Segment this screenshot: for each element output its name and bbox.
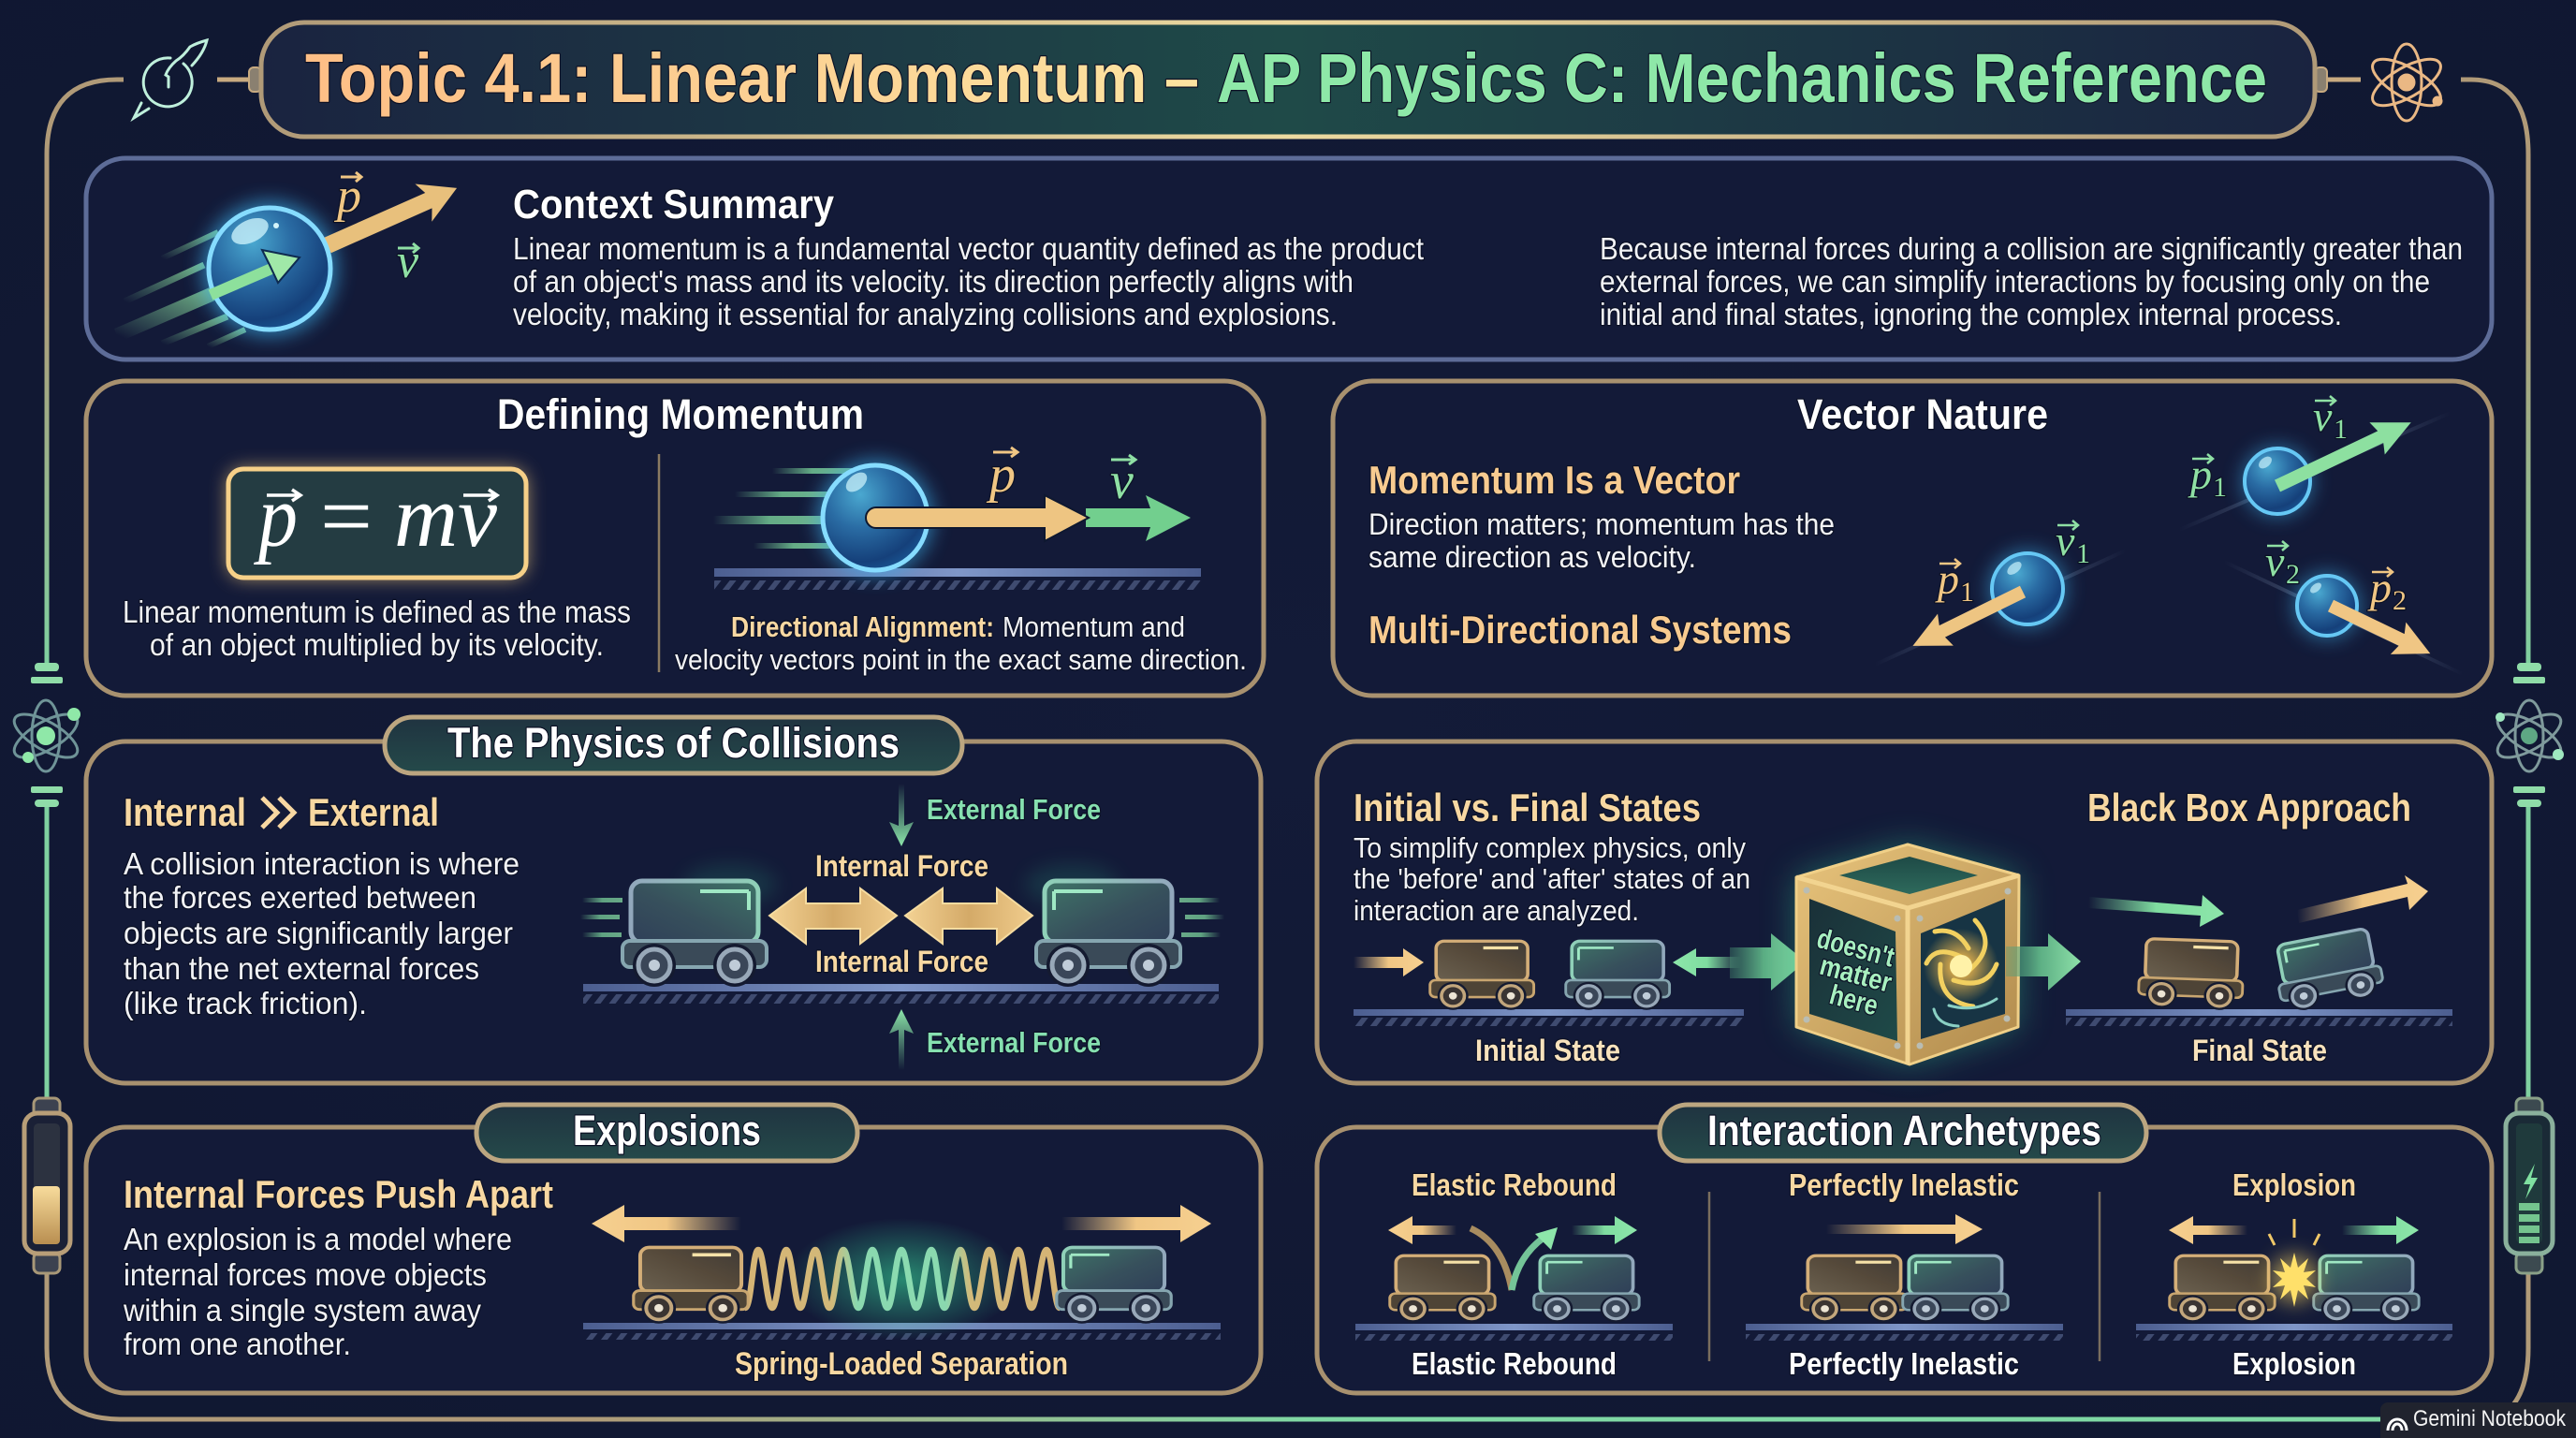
panel: interaction archetypes bbox=[1317, 1105, 2492, 1393]
arrow: external force down bbox=[889, 784, 914, 846]
text block: definition: of an object's mass and its velocity. its direction perfectly aligns with bbox=[513, 264, 1354, 299]
heading pill: interaction archetypes: Interaction Archetypes bbox=[1707, 1107, 2101, 1154]
label: spring-loaded separation: Spring-Loaded Separation bbox=[735, 1346, 1068, 1382]
header right atom icon bbox=[2365, 44, 2448, 121]
track: initial bbox=[1354, 1009, 1744, 1026]
right frame connector and atom icon bbox=[2492, 663, 2567, 807]
column: perfectly inelastic: Perfectly Inelastic bbox=[1789, 1167, 2019, 1202]
labels: p1 and v1 green: 1 bbox=[2334, 414, 2348, 445]
panel: initial vs final states bbox=[1317, 741, 2492, 1083]
column: explosion: Explosion bbox=[2232, 1346, 2356, 1381]
labels: p1 tan and v1 green: v bbox=[2056, 517, 2075, 565]
track bbox=[714, 568, 1201, 590]
label: p vector: p bbox=[333, 169, 361, 223]
text block: internal forces: Because internal forces during a collision are significantly greater than bbox=[1600, 231, 2463, 266]
heading pill: explosions: Explosions bbox=[573, 1107, 761, 1154]
labels: v2 and p2 bbox=[2265, 537, 2407, 616]
caption: definition bbox=[123, 594, 631, 662]
arrow: out of box bbox=[2006, 933, 2081, 990]
right cart bbox=[1057, 1247, 1171, 1324]
sphere A with green vector bbox=[2179, 406, 2451, 530]
text block: definition bbox=[513, 231, 1424, 331]
formula box bbox=[228, 468, 526, 578]
left cart bbox=[634, 1247, 748, 1324]
arrows: internal forces bbox=[769, 888, 1032, 944]
column: explosion: Explosion bbox=[2232, 1167, 2356, 1202]
formula box: = bbox=[320, 468, 373, 565]
sphere C with tan vector bbox=[2224, 562, 2463, 674]
formula box: mv bbox=[394, 468, 497, 565]
text: collision definition: A collision interaction is where bbox=[124, 846, 520, 881]
text: simplify bbox=[1354, 831, 1750, 927]
column: perfectly inelastic bbox=[1746, 1167, 2063, 1381]
text: simplify: the 'before' and 'after' states of an bbox=[1354, 862, 1750, 895]
label: internal force top: Internal Force bbox=[815, 849, 988, 883]
title text left: Topic 4.1: Linear Momentum – bbox=[305, 39, 1199, 117]
subheading: multi-directional systems: Multi-Directional Systems bbox=[1368, 608, 1792, 652]
text: collision definition bbox=[124, 846, 520, 1020]
initial carts and arrows bbox=[1354, 941, 1741, 1010]
panel: physics of collisions bbox=[86, 717, 1261, 1083]
swirl bbox=[1924, 920, 1998, 1026]
track bbox=[583, 984, 1219, 1004]
icon: sphere with aligned vectors bbox=[713, 460, 1191, 576]
text block: internal forces: initial and final states, ignoring the complex internal process. bbox=[1600, 297, 2342, 331]
labels: p1 and v1 green: p bbox=[2188, 450, 2212, 498]
label: p vector: p bbox=[986, 446, 1016, 504]
left cart bbox=[580, 864, 777, 987]
text block: internal forces: external forces, we can simplify interactions by focusing only on the bbox=[1600, 264, 2430, 299]
panel: explosions bbox=[86, 1105, 1261, 1393]
burst bbox=[2269, 1219, 2320, 1307]
labels: p1 and v1 green: v bbox=[2313, 392, 2333, 440]
title text right: AP Physics C: Mechanics Reference bbox=[1217, 39, 2267, 117]
panel: defining momentum bbox=[86, 381, 1264, 696]
track: final bbox=[2066, 1009, 2452, 1026]
label: external force top: External Force bbox=[927, 793, 1101, 826]
text: simplify: interaction are analyzed. bbox=[1354, 894, 1639, 927]
box text: doesn't bbox=[1814, 923, 1897, 974]
labels: v2 and p2: 2 bbox=[2286, 559, 2300, 590]
track bbox=[583, 1323, 1221, 1340]
label: v vector: v bbox=[397, 235, 419, 288]
subheading: momentum is a vector: Momentum Is a Vector bbox=[1368, 458, 1740, 502]
panel: vector nature bbox=[1333, 381, 2492, 696]
text block: internal forces bbox=[1600, 231, 2463, 331]
text: collision definition: (like track friction). bbox=[124, 986, 367, 1020]
text: collision definition: the forces exerted between bbox=[124, 880, 476, 915]
label: internal force bottom: Internal Force bbox=[815, 945, 988, 978]
header right connector bbox=[2315, 67, 2361, 92]
text: explosion definition: An explosion is a model where bbox=[124, 1222, 512, 1256]
caption: definition: Linear momentum is defined as the mass bbox=[123, 594, 631, 629]
caption: directional alignment: Momentum and bbox=[1003, 610, 1185, 643]
column: perfectly inelastic: Perfectly Inelastic bbox=[1789, 1346, 2019, 1381]
heading: context summary: Context Summary bbox=[513, 182, 834, 227]
header left connector bbox=[217, 67, 261, 92]
sphere B with tan vector bbox=[1875, 550, 2126, 665]
labels: v2 and p2: 2 bbox=[2393, 585, 2407, 616]
text: explosion definition: from one another. bbox=[124, 1327, 351, 1361]
text block: definition: Linear momentum is a fundamental vector quantity defined as the product bbox=[513, 231, 1424, 266]
heading pill: explosions bbox=[476, 1105, 857, 1161]
caption: directional alignment: velocity vectors point in the exact same direction. bbox=[675, 643, 1247, 676]
labels: p1 and v1 green bbox=[2188, 392, 2348, 503]
subheading: internal forces push apart: Internal Forces Push Apart bbox=[124, 1172, 553, 1216]
label: initial state: Initial State bbox=[1475, 1034, 1620, 1067]
labels: p1 tan and v1 green bbox=[1935, 517, 2090, 608]
caption: directional alignment: Directional Alignment: bbox=[731, 610, 994, 643]
column: elastic rebound bbox=[1355, 1167, 1673, 1381]
title plaque bbox=[261, 22, 2315, 137]
labels: v2 and p2: v bbox=[2265, 537, 2285, 585]
text: explosion definition: within a single system away bbox=[123, 1293, 481, 1328]
right cart bbox=[1025, 864, 1224, 987]
heading pill: the physics of collisions: The Physics of Collisions bbox=[447, 719, 900, 767]
label: final state: Final State bbox=[2192, 1034, 2327, 1067]
caption: definition: of an object multiplied by its velocity. bbox=[150, 627, 604, 662]
labels: p1 tan and v1 green: 1 bbox=[1960, 577, 1974, 608]
right battery capsule bbox=[2506, 1098, 2553, 1273]
arrow: right push bbox=[1061, 1205, 1211, 1242]
box text: matter bbox=[1817, 950, 1895, 999]
subheading: internal much greater than external bbox=[124, 790, 439, 834]
spring between carts bbox=[745, 1218, 1060, 1340]
subheading: black box approach: Black Box Approach bbox=[2087, 785, 2411, 829]
text: explosion definition bbox=[123, 1222, 512, 1361]
icon: momentum sphere bbox=[117, 169, 465, 346]
labels: v2 and p2: p bbox=[2367, 564, 2392, 611]
text: explosion definition: internal forces move objects bbox=[124, 1257, 487, 1292]
caption: directional alignment bbox=[675, 610, 1247, 676]
box text bbox=[1814, 923, 1897, 1021]
subheading: internal much greater than external: External bbox=[308, 790, 439, 834]
text: simplify: To simplify complex physics, only bbox=[1354, 831, 1746, 864]
label: external force bottom: External Force bbox=[927, 1026, 1101, 1059]
formula box: p bbox=[254, 468, 298, 565]
text: collision definition: than the net external forces bbox=[124, 951, 479, 986]
black box bbox=[1796, 844, 2019, 1064]
labels: p1 tan and v1 green: p bbox=[1935, 555, 1959, 603]
arrow: into box bbox=[1730, 933, 1806, 990]
column: elastic rebound: Elastic Rebound bbox=[1412, 1167, 1617, 1202]
heading: vector nature: Vector Nature bbox=[1797, 390, 2048, 438]
text: collision definition: objects are significantly larger bbox=[124, 916, 513, 950]
final carts and arrows bbox=[2088, 875, 2428, 1014]
text: direction matters: same direction as velocity. bbox=[1368, 540, 1696, 574]
subheading: internal much greater than external: Internal bbox=[124, 790, 246, 834]
text block: definition: velocity, making it essential for analyzing collisions and explosions. bbox=[513, 297, 1338, 331]
text: direction matters bbox=[1368, 507, 1835, 574]
labels: p1 and v1 green: 1 bbox=[2213, 472, 2227, 503]
left battery capsule bbox=[24, 1098, 70, 1273]
header left icon: clock-ball with arrow bbox=[134, 40, 207, 118]
panel: context summary bbox=[86, 158, 2492, 360]
text: direction matters: Direction matters; momentum has the bbox=[1368, 507, 1835, 541]
arrow: external force up bbox=[889, 1009, 914, 1070]
label: v vector: v bbox=[1110, 452, 1134, 510]
box text: here bbox=[1826, 979, 1881, 1021]
left frame connector and atom icon bbox=[8, 663, 83, 807]
subheading: initial vs final states: Initial vs. Final States bbox=[1354, 785, 1701, 829]
watermark badge bbox=[2380, 1402, 2576, 1438]
arrow: left push bbox=[592, 1205, 741, 1242]
column: explosion bbox=[2136, 1167, 2452, 1381]
labels: p1 tan and v1 green: 1 bbox=[2076, 538, 2090, 569]
heading: defining momentum: Defining Momentum bbox=[497, 390, 864, 438]
column: elastic rebound: Elastic Rebound bbox=[1412, 1346, 1617, 1381]
